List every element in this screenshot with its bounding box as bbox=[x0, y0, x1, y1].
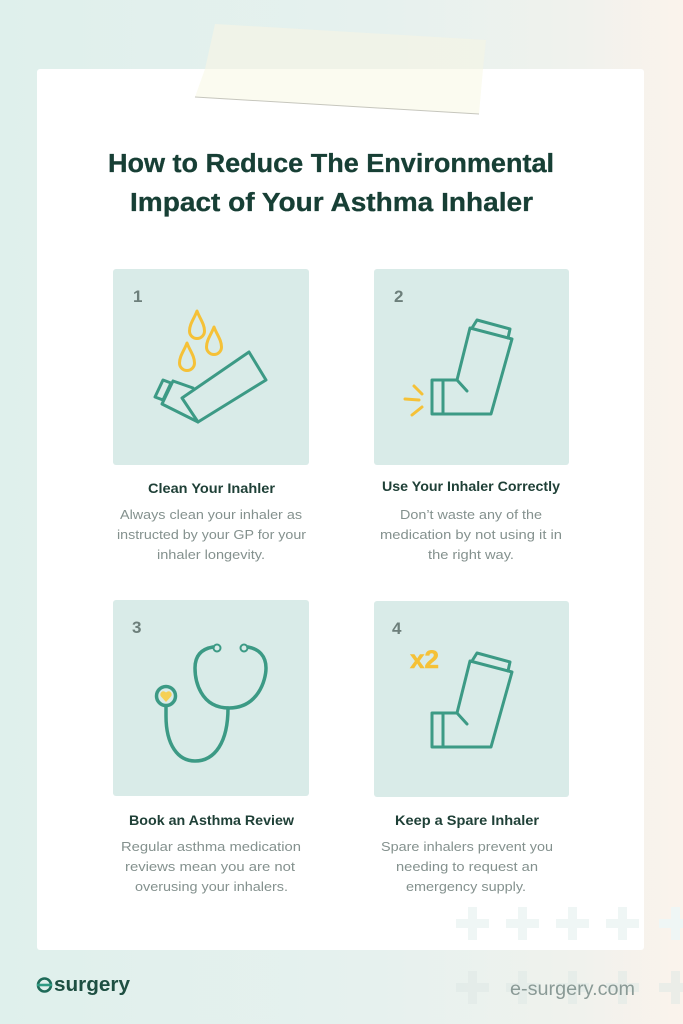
icon: x2 label: x2 bbox=[410, 646, 439, 674]
title: How to Reduce The Environmental bbox=[108, 150, 554, 178]
decorative plus pattern on footer bbox=[456, 971, 683, 1004]
step 3 tile bbox=[113, 600, 309, 796]
logo wordmark: surgery bbox=[54, 974, 131, 996]
step 4 tile bbox=[374, 601, 569, 797]
panel: step 3 book an asthma review bbox=[113, 600, 309, 894]
icon: inhaler bbox=[432, 653, 512, 747]
icon: water drops bbox=[180, 311, 222, 370]
icon: heart bbox=[160, 691, 172, 702]
decorative plus pattern on panel bbox=[456, 907, 683, 940]
icon: spray sparks bbox=[405, 386, 422, 415]
step 2 number: 2 bbox=[394, 287, 403, 306]
panel: step 2 use your inhaler correctly bbox=[374, 269, 569, 562]
step 4 description: emergency supply. bbox=[406, 879, 526, 894]
step 1 description: Always clean your inhaler as bbox=[120, 507, 302, 522]
step 1 heading: Clean Your Inahler bbox=[148, 481, 276, 496]
icon: logo mark bbox=[37, 978, 52, 992]
website url: e-surgery.com bbox=[510, 979, 635, 1000]
step 3 description: overusing your inhalers. bbox=[135, 879, 288, 894]
white panel bbox=[37, 69, 644, 950]
step 3 number: 3 bbox=[132, 618, 141, 637]
step 1 number: 1 bbox=[133, 287, 142, 306]
step 1 description: inhaler longevity. bbox=[157, 547, 265, 562]
step 2 heading: Use Your Inhaler Correctly bbox=[382, 479, 561, 494]
step 3 heading: Book an Asthma Review bbox=[129, 813, 295, 828]
step 1 description: instructed by your GP for your bbox=[117, 527, 307, 542]
title: Impact of Your Asthma Inhaler bbox=[130, 189, 533, 217]
title bbox=[108, 150, 554, 217]
step 4 description: Spare inhalers prevent you bbox=[381, 839, 553, 854]
step 1 tile bbox=[113, 269, 309, 465]
step 3 description: reviews mean you are not bbox=[125, 859, 295, 874]
step 4 heading: Keep a Spare Inhaler bbox=[395, 813, 540, 828]
tape bbox=[195, 24, 486, 114]
icon: inhaler lying down bbox=[155, 352, 266, 422]
panel: step 4 keep a spare inhaler bbox=[374, 601, 569, 894]
step 1 description bbox=[117, 507, 307, 562]
logo bbox=[37, 974, 131, 996]
step 4 description bbox=[381, 839, 553, 894]
step 2 description: Don’t waste any of the bbox=[400, 507, 542, 522]
step 2 description bbox=[380, 507, 562, 562]
step 3 description: Regular asthma medication bbox=[121, 839, 301, 854]
step 4 description: needing to request an bbox=[396, 859, 538, 874]
step 3 description bbox=[121, 839, 301, 894]
step 2 description: medication by not using it in bbox=[380, 527, 562, 542]
icon: stethoscope bbox=[156, 644, 266, 761]
step 2 tile bbox=[374, 269, 569, 465]
icon: inhaler bbox=[432, 320, 512, 414]
step 2 description: the right way. bbox=[428, 547, 514, 562]
step 4 number: 4 bbox=[392, 619, 402, 638]
panel: step 1 clean your inhaler bbox=[113, 269, 309, 562]
